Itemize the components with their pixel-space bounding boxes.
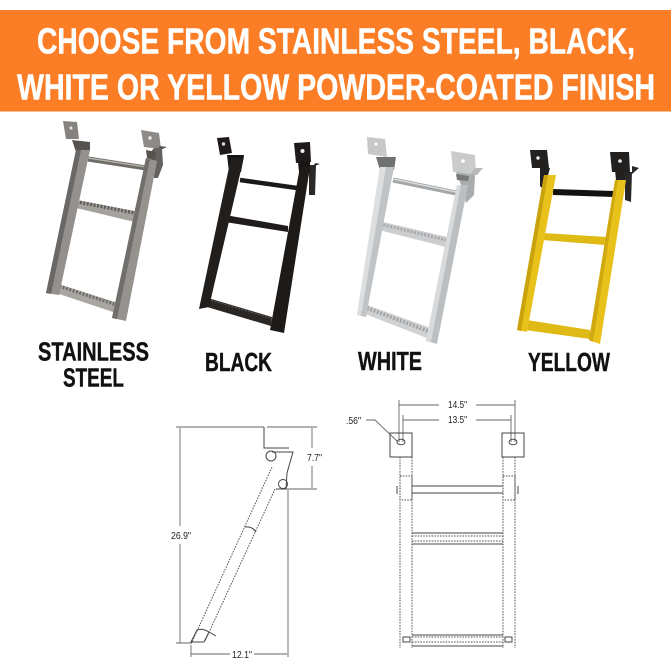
label: white: WHITE [358, 348, 422, 376]
diagram: front view dimensions [346, 400, 524, 648]
dimension: 7.7 inches: 7.7" [307, 453, 322, 464]
label: stainless steel [38, 338, 149, 392]
dimension: 13.5 inches: 13.5" [448, 415, 467, 426]
dimension: 14.5 inches: 14.5" [448, 400, 467, 411]
ladder: yellow [517, 150, 639, 344]
dimension: 26.9 inches: 26.9" [171, 531, 191, 542]
dimension: 0.56 inches: .56" [346, 416, 361, 427]
label: yellow: YELLOW [528, 349, 611, 377]
label: stainless steel: STEEL [63, 364, 124, 392]
title [17, 20, 655, 108]
label: stainless steel: STAINLESS [38, 338, 149, 366]
ladder: stainless steel [46, 121, 167, 321]
dimension: 12.1 inches: 12.1" [232, 650, 252, 661]
diagram: side view dimensions [171, 427, 322, 661]
label: black: BLACK [205, 349, 272, 377]
ladder: white [357, 137, 483, 344]
ladder: black [199, 137, 320, 333]
banner: orange header [0, 10, 671, 112]
